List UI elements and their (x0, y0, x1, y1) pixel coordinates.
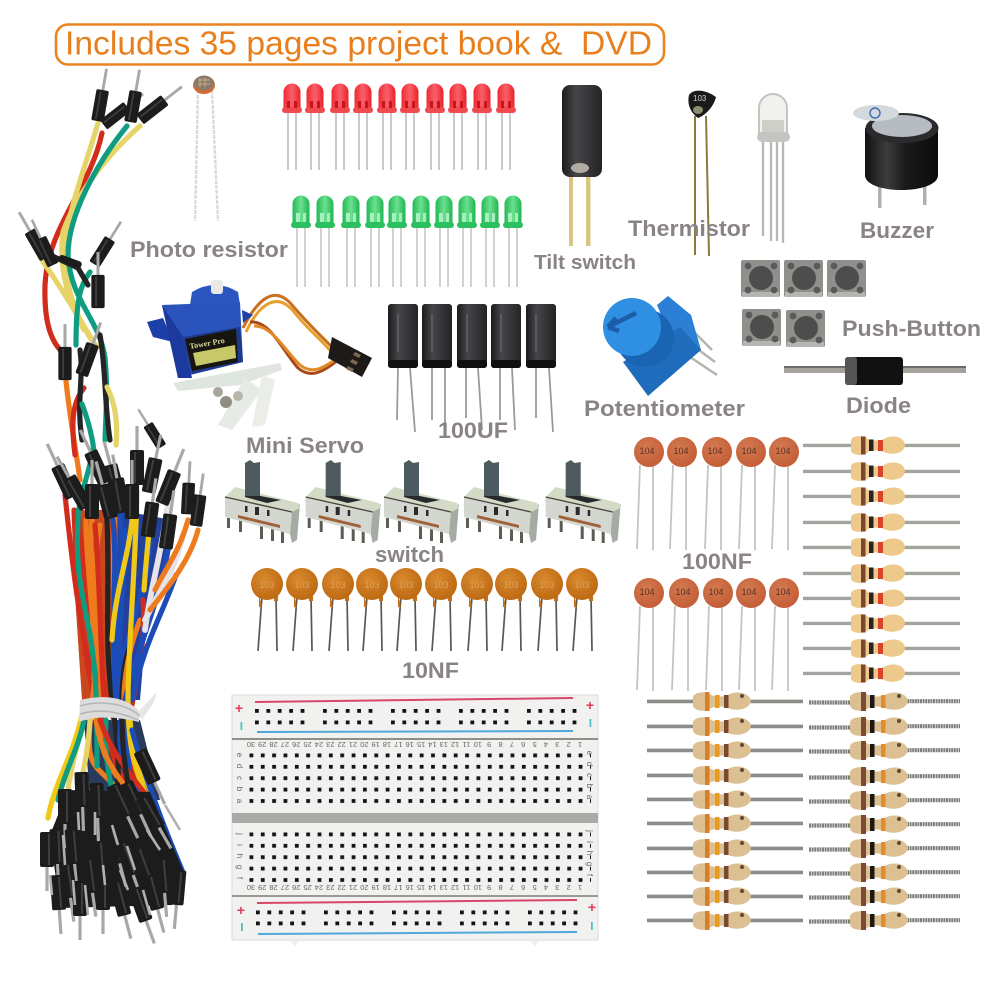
row letters: e (235, 753, 244, 758)
100NF capacitors top row: 104 (673, 446, 689, 456)
row letters: a (585, 795, 594, 800)
lower column numbers: 23 (326, 883, 334, 892)
10NF capacitors: 103 (294, 580, 310, 590)
row letters: c (235, 776, 244, 780)
row letters: g (235, 865, 244, 869)
100NF capacitors bottom row: 104 (741, 587, 757, 597)
lower column numbers: 13 (440, 883, 448, 892)
lower column numbers: 29 (258, 883, 266, 892)
green LEDs (291, 196, 523, 287)
upper column numbers: 15 (417, 740, 425, 749)
10NF capacitors (251, 568, 598, 651)
upper loose wires (43, 123, 140, 480)
row letters: g (585, 862, 594, 866)
row letters: e (585, 751, 594, 756)
upper column numbers: 18 (383, 740, 391, 749)
upper column numbers: 13 (440, 740, 448, 749)
lower column numbers: 20 (360, 883, 368, 892)
lower column numbers: 12 (451, 883, 459, 892)
row letters: d (585, 762, 594, 766)
slide switches (225, 460, 621, 543)
resistors lower right column (809, 692, 960, 930)
upper column numbers: 9 (487, 740, 491, 749)
label: photo resistor: Photo resistor (130, 237, 288, 262)
upper column numbers: 14 (428, 740, 437, 749)
10NF capacitors: 103 (574, 580, 590, 590)
100NF capacitors bottom row: 104 (675, 587, 691, 597)
upper column numbers: 12 (451, 740, 459, 749)
resistors right column upper (803, 436, 960, 683)
resistors lower left column (647, 692, 803, 930)
lower column numbers: 24 (315, 883, 323, 892)
100NF capacitors top row: 104 (639, 446, 655, 456)
label: thermistor: Thermistor (628, 216, 750, 241)
upper column numbers: 19 (372, 740, 380, 749)
thermistor (688, 91, 716, 256)
top connectors (14, 68, 186, 380)
diode (784, 357, 966, 385)
bottom power rail (237, 899, 596, 934)
photo resistor (193, 76, 218, 221)
label: 100UF: 100UF (438, 418, 508, 443)
upper column numbers: 22 (337, 740, 346, 749)
100NF capacitors top row (634, 437, 799, 550)
lower column numbers: 21 (349, 883, 357, 892)
row letters: b (235, 787, 244, 792)
main bundle wires (48, 404, 198, 870)
lower column numbers: 11 (463, 883, 470, 892)
lower column numbers: 2 (567, 883, 571, 892)
servo label (185, 329, 238, 371)
100NF capacitors bottom row (634, 578, 799, 691)
upper column numbers: 7 (510, 740, 514, 749)
10NF capacitors: 103 (259, 580, 275, 590)
lower column numbers: 5 (533, 883, 537, 892)
upper column numbers: 4 (544, 740, 548, 749)
servo (147, 280, 372, 430)
servo connector (328, 337, 372, 377)
100NF capacitors bottom row: 104 (708, 587, 724, 597)
top power rail: + (586, 697, 594, 713)
upper column numbers: 20 (360, 740, 368, 749)
row letters: i (585, 841, 594, 843)
row letters: c (585, 773, 594, 777)
tie point holes (249, 753, 591, 884)
row letters: i (235, 844, 244, 846)
100NF capacitors bottom row: 104 (775, 587, 791, 597)
electrolytic capacitors (388, 304, 556, 432)
lower column numbers: 10 (474, 883, 482, 892)
bundle fill (74, 510, 172, 800)
label: 100NF: 100NF (682, 549, 752, 574)
row letters: j (235, 832, 244, 835)
label: mini servo: Mini Servo (246, 433, 364, 458)
bottom power rail: + (588, 899, 596, 915)
push buttons (741, 260, 866, 347)
upper column numbers: 5 (533, 740, 537, 749)
lower column numbers: 25 (303, 883, 312, 892)
lower column numbers: 22 (337, 883, 346, 892)
10NF capacitors: 103 (330, 580, 346, 590)
upper column numbers: 3 (555, 740, 559, 749)
buzzer (853, 105, 938, 208)
lower column numbers: 28 (269, 883, 278, 892)
lower column numbers: 14 (428, 883, 437, 892)
10NF capacitors: 103 (539, 580, 555, 590)
lower column numbers: 4 (544, 883, 548, 892)
label: tilt switch: Tilt switch (534, 252, 636, 274)
upper column numbers: 6 (521, 740, 525, 749)
upper column numbers: 1 (578, 740, 582, 749)
row letters: h (235, 854, 244, 858)
upper column numbers: 8 (498, 740, 503, 749)
bottom connectors (40, 748, 186, 946)
100NF capacitors bottom row: 104 (639, 587, 655, 597)
label: switch: switch (375, 542, 444, 567)
lower column numbers: 26 (292, 883, 300, 892)
upper column numbers: 29 (258, 740, 266, 749)
10NF capacitors: 103 (433, 580, 449, 590)
10NF capacitors: 103 (503, 580, 519, 590)
lower column numbers: 8 (498, 883, 503, 892)
label: diode: Diode (846, 393, 911, 418)
lower column numbers: 1 (578, 883, 582, 892)
wire tie (79, 692, 157, 722)
servo label: Tower Pro (189, 336, 225, 351)
lower column numbers: 16 (406, 883, 414, 892)
label: potentiometer: Potentiometer (584, 396, 745, 421)
100NF capacitors top row: 104 (775, 446, 791, 456)
label: push button: Push-Button (842, 316, 981, 341)
upper column numbers: 10 (474, 740, 482, 749)
upper column numbers: 24 (315, 740, 323, 749)
upper column numbers: 28 (269, 740, 278, 749)
100NF capacitors top row: 104 (741, 446, 757, 456)
10NF capacitors: 103 (469, 580, 485, 590)
row letters: f (235, 877, 244, 880)
thermistor: 103 (693, 94, 707, 103)
upper column numbers: 26 (292, 740, 300, 749)
red LEDs (282, 84, 516, 170)
tilt switch (562, 85, 602, 246)
top power rail: + (235, 700, 243, 716)
servo wires (243, 295, 340, 373)
upper column numbers: 27 (281, 740, 289, 749)
row letters: j (585, 829, 594, 832)
lower column numbers: 9 (487, 883, 491, 892)
upper column numbers: 16 (406, 740, 414, 749)
row letters: b (585, 784, 594, 789)
10NF capacitors: 103 (398, 580, 414, 590)
label: 10NF: 10NF (402, 658, 459, 683)
top power rail (235, 697, 594, 732)
row letters (235, 751, 594, 880)
lower column numbers: 19 (372, 883, 380, 892)
middle connectors (41, 407, 209, 550)
upper column numbers: 17 (394, 740, 403, 749)
upper column numbers: 2 (567, 740, 571, 749)
board body (232, 695, 598, 946)
100NF capacitors top row: 104 (707, 446, 723, 456)
lower column numbers: 6 (521, 883, 525, 892)
RGB LED (757, 94, 790, 243)
lower column numbers: 15 (417, 883, 425, 892)
potentiometer (603, 296, 717, 396)
servo body (147, 280, 253, 378)
lower column numbers: 17 (394, 883, 403, 892)
lower column numbers: 7 (510, 883, 514, 892)
row letters: h (585, 851, 594, 855)
row letters: a (235, 799, 244, 804)
upper column numbers: 23 (326, 740, 334, 749)
lower column numbers: 30 (247, 883, 255, 892)
bottom power rail: + (237, 902, 245, 918)
upper column numbers: 11 (463, 740, 470, 749)
lower column numbers: 18 (383, 883, 391, 892)
upper column numbers: 25 (303, 740, 312, 749)
10NF capacitors: 103 (364, 580, 380, 590)
lower column numbers: 3 (555, 883, 559, 892)
row letters: d (235, 764, 244, 768)
upper column numbers: 21 (349, 740, 357, 749)
label: buzzer: Buzzer (860, 218, 934, 243)
lower column numbers: 27 (281, 883, 289, 892)
row letters: f (585, 874, 594, 877)
upper column numbers: 30 (247, 740, 255, 749)
servo horns (173, 363, 282, 430)
title: Includes 35 pages project book & DVD (65, 24, 652, 62)
breadboard (232, 695, 598, 946)
jumper wire bundle (14, 68, 209, 946)
